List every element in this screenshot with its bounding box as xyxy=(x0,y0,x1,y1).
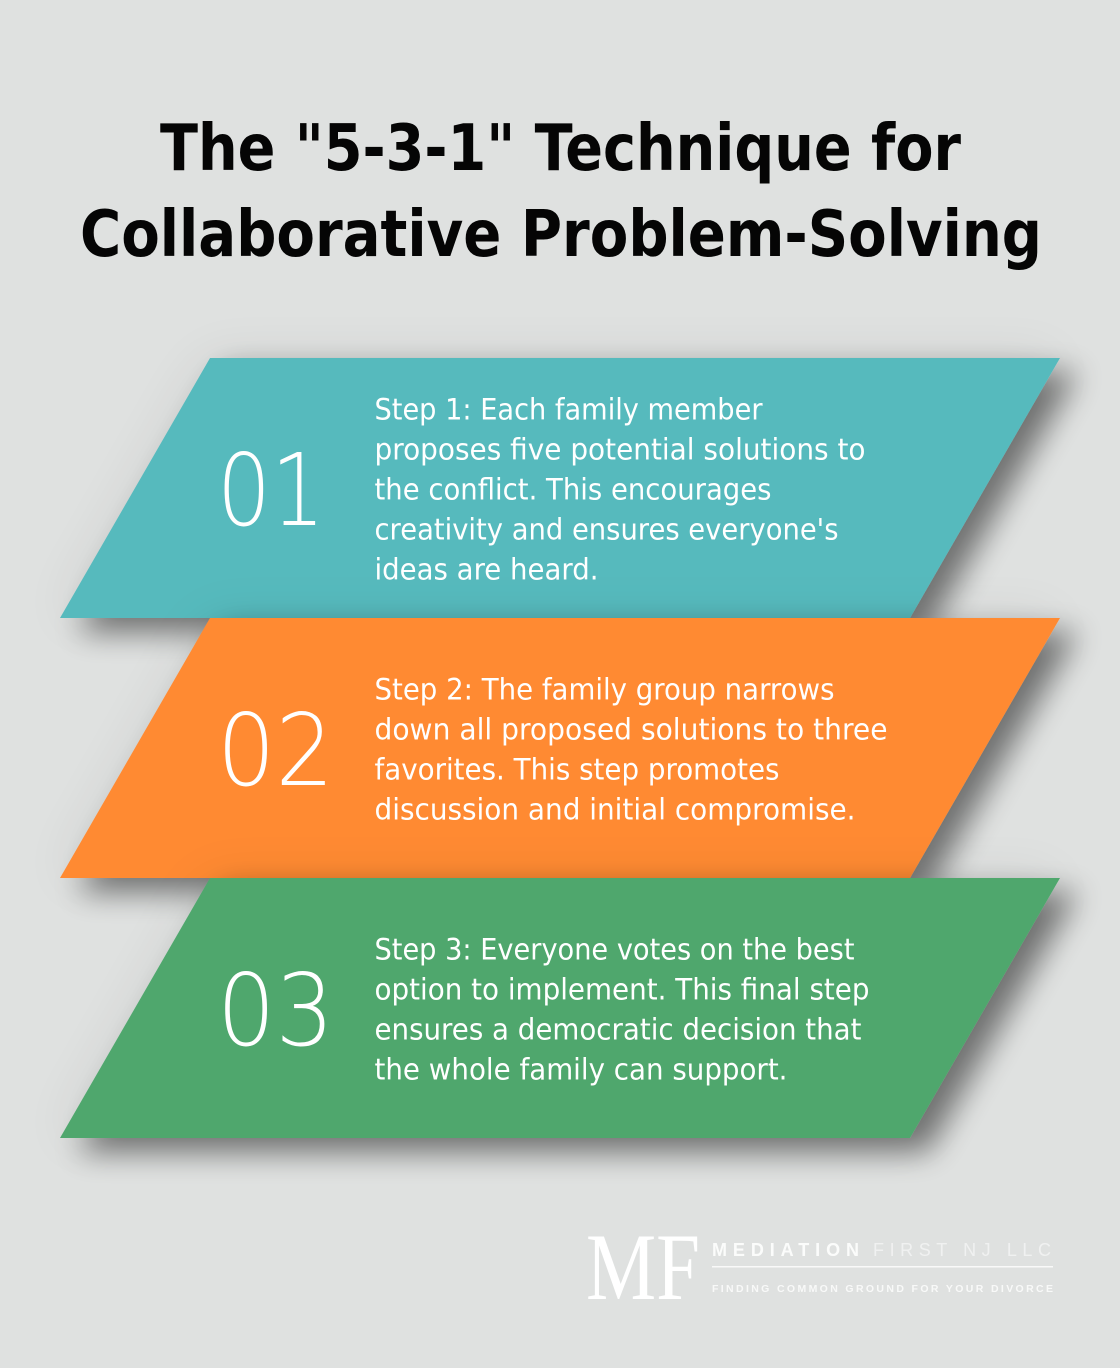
logo name: MEDIATION xyxy=(712,1240,859,1260)
step 1 text: Step 1: Each family member xyxy=(374,392,763,426)
step 2 text: favorites. This step promotes xyxy=(374,752,780,786)
step 2 number: 02 xyxy=(217,692,334,809)
title: The "5-3-1" Technique for xyxy=(160,112,961,186)
title xyxy=(80,112,1042,272)
step 1 text: ideas are heard. xyxy=(374,552,598,586)
step 2 text: discussion and initial compromise. xyxy=(374,792,856,826)
step 3 green parallelogram xyxy=(60,878,1060,1138)
logo tagline: FINDING COMMON GROUND FOR YOUR DIVORCE xyxy=(712,1283,1053,1295)
panel: step 1 xyxy=(60,358,1060,618)
step 2 text: down all proposed solutions to three xyxy=(374,712,888,746)
step 1 teal parallelogram xyxy=(60,358,1060,618)
step 1 text xyxy=(374,392,866,586)
panel: step 2 xyxy=(60,618,1060,878)
step 3 text: option to implement. This final step xyxy=(374,972,870,1006)
logo name light: FIRST NJ LLC xyxy=(873,1240,1051,1260)
logo rule xyxy=(712,1266,1053,1268)
step 1 text: proposes five potential solutions to xyxy=(374,432,866,466)
step 1 number: 01 xyxy=(217,432,325,549)
step 2 text xyxy=(374,672,888,826)
step 3 number: 03 xyxy=(217,952,334,1069)
step 1 text: the conflict. This encourages xyxy=(374,472,772,506)
step 2 text: Step 2: The family group narrows xyxy=(374,672,834,706)
logo: Mediation First NJ LLC xyxy=(586,1214,1053,1320)
panel: step 3 xyxy=(60,878,1060,1138)
step 1 text: creativity and ensures everyone's xyxy=(374,512,838,546)
step 3 text: Step 3: Everyone votes on the best xyxy=(374,932,854,966)
step 3 text: the whole family can support. xyxy=(374,1052,788,1086)
logo monogram: MF xyxy=(586,1214,700,1320)
step 2 orange parallelogram xyxy=(60,618,1060,878)
step 3 text: ensures a democratic decision that xyxy=(374,1012,862,1046)
step 3 text xyxy=(374,932,870,1086)
